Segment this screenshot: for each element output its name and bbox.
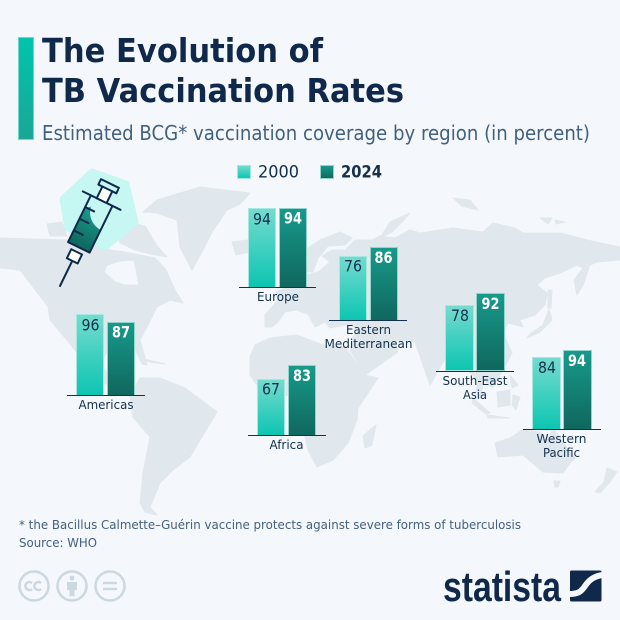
footnote: * the Bacillus Calmette–Guérin vaccine protects against severe forms of tuberculosis: [19, 517, 521, 532]
bar chart: Western Pacific: 94: [568, 351, 586, 370]
bar chart: South-East Asia: Asia: [463, 387, 487, 402]
icon: creative commons licence: [20, 572, 124, 600]
bar chart: South-East Asia: South-East: [442, 373, 508, 388]
bar chart: Western Pacific: [523, 350, 601, 460]
bar chart: Eastern Mediterranean: 76: [344, 256, 362, 276]
bar chart: Africa: Africa: [270, 437, 304, 452]
bar chart: Western Pacific: 84: [538, 358, 556, 377]
bar chart: Americas: [67, 314, 145, 412]
bar chart: Eastern Mediterranean: [324, 248, 412, 351]
bar chart: Africa: 83: [293, 366, 311, 385]
world map: [0, 187, 620, 515]
legend: 2000: [258, 162, 299, 182]
bar chart: Americas: Americas: [78, 397, 134, 412]
bar chart: Europe: Europe: [257, 289, 299, 304]
bar chart: Eastern Mediterranean: Mediterranean: [324, 336, 412, 351]
legend: [238, 162, 382, 182]
title: The Evolution of: [42, 31, 324, 70]
bar chart: Europe: [239, 208, 316, 304]
bar chart: Americas: 87: [112, 322, 130, 342]
bar chart: Western Pacific: Pacific: [543, 445, 580, 460]
legend: 2024: [341, 162, 382, 182]
bar chart: Europe: 94: [284, 208, 302, 228]
title: [42, 31, 404, 110]
bar chart: Americas: 96: [82, 316, 100, 334]
title accent bar: [18, 38, 34, 140]
bar chart: Africa: 67: [262, 380, 280, 398]
bar chart: Europe: 94: [253, 210, 271, 228]
icon: syringe: [41, 172, 135, 295]
logo: statista: statista: [443, 563, 562, 610]
bar chart: Western Pacific: Western: [536, 431, 586, 446]
bar chart: South-East Asia: [436, 294, 514, 402]
bar chart: Africa: [248, 366, 326, 452]
bar chart: South-East Asia: 92: [482, 294, 500, 313]
title: TB Vaccination Rates: [42, 71, 404, 110]
source: Source: WHO: [19, 535, 97, 550]
bar chart: Eastern Mediterranean: Eastern: [346, 322, 391, 337]
bar chart: South-East Asia: 78: [451, 306, 469, 325]
bar chart: Eastern Mediterranean: 86: [374, 248, 392, 267]
